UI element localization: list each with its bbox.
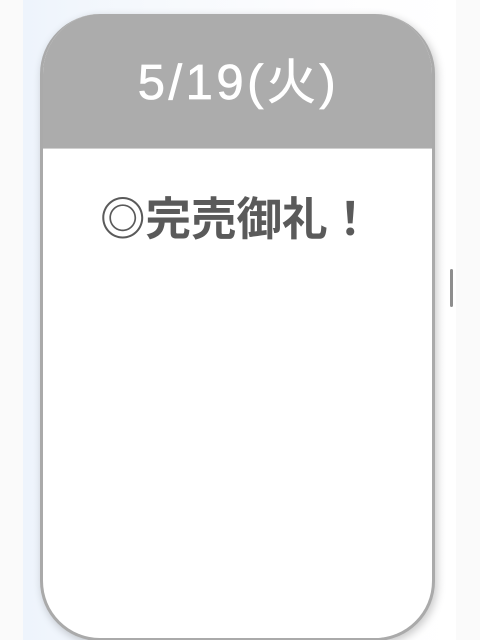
text: sold out message: ◎完売御礼！ — [100, 194, 373, 245]
heading: date: 5/19(火) — [138, 56, 339, 110]
card header band — [40, 14, 435, 149]
scrollbar handle — [450, 269, 453, 307]
